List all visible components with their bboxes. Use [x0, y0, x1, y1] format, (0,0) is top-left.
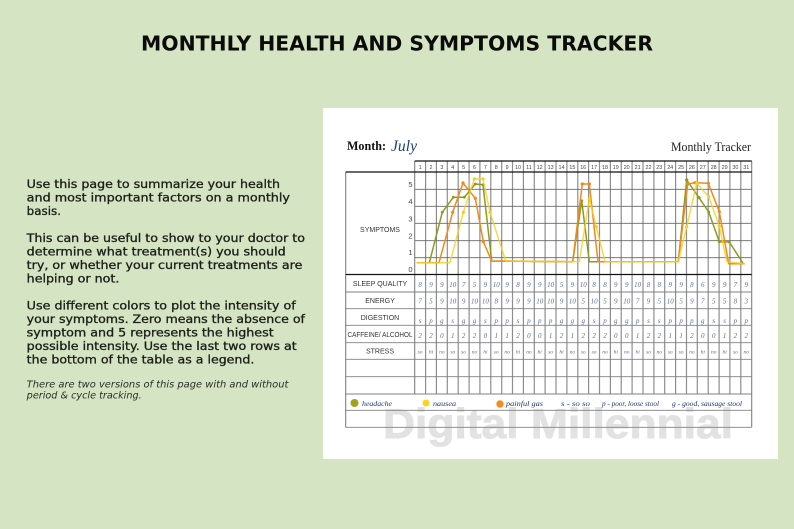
row values: caffeine and alcohol: 0	[701, 332, 705, 340]
row values: caffeine and alcohol: 0	[440, 332, 444, 340]
row values: digestion: p	[667, 317, 672, 325]
row values: sleep quality: 10	[547, 281, 555, 289]
day numbers header: 20	[624, 165, 630, 171]
paragraph: summary	[27, 177, 290, 218]
title: MONTHLY HEALTH AND SYMPTOMS TRACKER	[141, 32, 653, 56]
row labels: SLEEP QUALITY	[353, 281, 407, 288]
line: painful gas	[417, 181, 745, 264]
row values: stress: hi	[538, 350, 542, 356]
day numbers header: 30	[732, 165, 738, 171]
day numbers header: 2	[430, 165, 432, 171]
paragraph: colors: possible intensity. Use the last two rows at	[27, 339, 297, 353]
row values: stress: no	[602, 350, 608, 356]
row values: sleep quality: 8	[658, 281, 662, 289]
day numbers header: 22	[646, 165, 652, 171]
row values: stress: so	[679, 350, 684, 356]
legend key: digestion poor: p - poor, loose stool	[601, 399, 659, 408]
row values: digestion: g	[625, 317, 629, 325]
row values: stress: hi	[701, 350, 705, 356]
sheet heading: Monthly Tracker	[671, 140, 752, 154]
row values: stress: so	[668, 350, 673, 356]
row values: stress: hi	[516, 350, 521, 356]
day numbers header: 5	[462, 165, 465, 171]
row values: sleep quality: 9	[625, 281, 629, 289]
row values: sleep quality: 9	[668, 281, 672, 289]
legend label: headache: headache	[362, 399, 393, 408]
row values: energy: 10	[449, 298, 457, 306]
row values: sleep quality: 8	[603, 281, 607, 289]
row values: sleep quality: 9	[745, 281, 749, 289]
row values: energy: 5	[712, 298, 716, 306]
row values: stress: no	[711, 350, 717, 356]
table grid	[346, 161, 752, 427]
row values: stress: no	[624, 350, 630, 356]
row values: caffeine and alcohol: 0	[625, 332, 629, 340]
row values: energy: 5	[581, 298, 585, 306]
row values: caffeine and alcohol: 0	[484, 332, 488, 340]
row values: caffeine and alcohol: 2	[581, 332, 585, 340]
row values: digestion: g	[560, 317, 564, 325]
row values: stress: hi	[635, 350, 640, 356]
row values: energy: 5	[603, 298, 607, 306]
row values: energy: 7	[701, 298, 705, 306]
row values: energy: 9	[516, 298, 520, 306]
note: versions: period & cycle tracking.	[26, 390, 142, 402]
row values: sleep quality: 9	[429, 281, 433, 289]
legend label: painful gas: painful gas	[505, 399, 543, 408]
row values: digestion: s	[419, 317, 422, 325]
day numbers header: 4	[451, 165, 454, 171]
day numbers header: 21	[635, 165, 641, 171]
row values: energy: 9	[527, 298, 531, 306]
legend marker: nausea	[422, 400, 430, 406]
row values: caffeine and alcohol: 2	[603, 332, 607, 340]
symptom scale axis: 1	[408, 248, 413, 257]
symptom scale axis: 4	[408, 197, 413, 206]
symptom scale axis: 0	[408, 265, 413, 274]
paragraph: doctor	[26, 231, 305, 286]
row values: sleep quality: 10	[580, 281, 587, 289]
paragraph: colors: the bottom of the table as a legend.	[27, 352, 254, 366]
day numbers header: 8	[495, 165, 498, 171]
symptom scale axis: 5	[408, 180, 413, 189]
row values: sleep quality: 8	[418, 281, 422, 289]
row values: sleep quality: 9	[440, 281, 444, 289]
paragraph: colors: your symptoms. Zero means the absence of	[27, 312, 306, 326]
row values: digestion: g	[701, 317, 705, 325]
row values: caffeine and alcohol: 1	[451, 332, 455, 340]
row values: energy: 8	[494, 298, 498, 306]
row values: sleep quality: 7	[462, 281, 466, 289]
row values: caffeine and alcohol: 2	[592, 332, 596, 340]
row values: energy: 3	[744, 298, 749, 306]
legend key: digestion so so: s - so so	[561, 399, 590, 408]
row values: sleep quality: 8	[516, 281, 520, 289]
row values: stress: no	[439, 350, 445, 356]
day numbers header: 29	[722, 165, 728, 171]
symptom scale axis: 3	[408, 214, 413, 223]
row values: sleep quality: 8	[592, 281, 596, 289]
row values: digestion: p	[548, 317, 553, 325]
row values: caffeine and alcohol: 2	[462, 332, 466, 340]
row values: stress: no	[504, 350, 510, 356]
day numbers header: 11	[526, 165, 532, 171]
month handwritten value: July	[391, 138, 418, 155]
row values: stress: so	[548, 350, 553, 356]
row values: energy: 9	[505, 298, 509, 306]
row values: stress: hi	[429, 350, 434, 356]
row values: stress: no	[657, 350, 662, 356]
row values: digestion: p	[678, 317, 683, 325]
row values: sleep quality: 9	[571, 281, 575, 289]
row values: energy: 7	[418, 298, 422, 306]
row values: caffeine and alcohol: 1	[636, 332, 639, 340]
row values: digestion: g	[571, 317, 575, 325]
row values: energy: 5	[429, 298, 433, 306]
row values: sleep quality: 9	[679, 281, 683, 289]
row values: digestion: g	[614, 317, 618, 325]
row values: caffeine and alcohol: 0	[712, 332, 716, 340]
day numbers header: 24	[667, 165, 673, 171]
month label: Month:	[347, 139, 386, 153]
day numbers header: 23	[656, 165, 662, 171]
row values: stress: so	[733, 350, 738, 356]
paragraph: doctor: try, or whether your current treatments are	[27, 258, 302, 272]
row values: digestion: p	[635, 317, 640, 325]
row values: sleep quality: 8	[647, 281, 651, 289]
day numbers header: 19	[613, 165, 619, 171]
row values: digestion: g	[581, 317, 585, 325]
row values: digestion: g	[473, 317, 477, 325]
paragraph: colors: symptom and 5 represents the highest	[27, 326, 274, 340]
watermark: Digital Millennial	[383, 400, 733, 447]
day numbers header: 1	[419, 165, 422, 171]
chart: symptom lines	[417, 177, 745, 264]
row values: caffeine and alcohol: 2	[418, 332, 422, 340]
row values: stress: so	[592, 350, 597, 356]
row values: energy: 10	[667, 298, 674, 306]
row values: caffeine and alcohol: 0	[614, 332, 618, 340]
row labels: ENERGY	[365, 298, 395, 305]
paragraph: summary: and most important factors on a monthly	[27, 190, 290, 204]
paragraph: doctor: helping or not.	[27, 272, 119, 286]
row values: digestion: g	[462, 317, 466, 325]
row values: caffeine and alcohol: 2	[745, 332, 749, 340]
row values: digestion: p	[689, 317, 694, 325]
day numbers header: 17	[591, 165, 597, 171]
row values: stress: so	[450, 350, 455, 356]
row values: digestion: p	[493, 317, 498, 325]
row values: digestion: s	[593, 317, 596, 325]
legend marker: headache	[350, 399, 358, 407]
day numbers header: 27	[700, 165, 706, 171]
day numbers header: 10	[515, 165, 521, 171]
row values: caffeine and alcohol: 2	[647, 332, 651, 340]
legend	[350, 399, 742, 408]
note: versions	[26, 380, 289, 402]
row labels: SYMPTOMS	[360, 227, 400, 234]
row values: stress: no	[570, 350, 575, 356]
row values: stress: hi	[559, 350, 564, 356]
row values: digestion: p	[504, 317, 509, 325]
row values: energy: 9	[690, 298, 694, 306]
legend key: digestion good: g - good, sausage stool	[672, 399, 742, 408]
day numbers header: 16	[580, 165, 586, 171]
row values: sleep quality: 5	[473, 281, 477, 289]
row values: caffeine and alcohol: 1	[723, 332, 726, 340]
row values: digestion: s	[712, 317, 715, 325]
row values: sleep quality: 6	[701, 281, 705, 289]
day numbers header: 26	[689, 165, 695, 171]
row values: sleep quality: 9	[614, 281, 618, 289]
row values: digestion: s	[484, 317, 487, 325]
day numbers header: 18	[602, 165, 608, 171]
row values: energy: 7	[636, 298, 640, 306]
row values: caffeine and alcohol: 2	[560, 332, 564, 340]
paragraph: doctor: This can be useful to show to your doctor to	[26, 231, 305, 245]
legend marker: painful gas	[496, 400, 504, 408]
line: nausea	[417, 177, 745, 264]
day numbers header: 25	[678, 165, 684, 171]
row values: digestion: p	[526, 317, 531, 325]
day numbers header: 14	[558, 165, 564, 171]
row values: stress: hi	[483, 350, 488, 356]
row values: sleep quality: 9	[723, 281, 727, 289]
row values: energy: 5	[723, 298, 727, 306]
text block: instructions	[26, 177, 306, 402]
row values: sleep quality: 10	[634, 281, 642, 289]
row values: stress: so	[646, 350, 651, 356]
day numbers header: 9	[506, 165, 509, 171]
day numbers header: 13	[548, 165, 554, 171]
row values: digestion: p	[733, 317, 738, 325]
row values: caffeine and alcohol: 2	[429, 332, 433, 340]
panel: tracker sheet	[323, 108, 778, 459]
row values: caffeine and alcohol: 2	[690, 332, 694, 340]
row values: stress: hi	[614, 350, 618, 356]
day numbers header: 7	[484, 165, 487, 171]
row values: digestion: p	[428, 317, 433, 325]
row values: energy: 10	[482, 298, 489, 306]
row values: energy: 10	[536, 298, 544, 306]
row values: caffeine and alcohol: 1	[549, 332, 552, 340]
row values: stress: so	[494, 350, 499, 356]
row values: caffeine and alcohol: 2	[516, 332, 520, 340]
row values: caffeine and alcohol: 2	[658, 332, 662, 340]
symptom scale axis: 2	[408, 231, 413, 240]
row values: caffeine and alcohol: 1	[679, 332, 683, 340]
row values: caffeine and alcohol: 1	[571, 332, 574, 340]
day numbers header: 3	[440, 165, 443, 171]
row values: sleep quality: 8	[690, 281, 694, 289]
note: versions: There are two versions of this page with and without	[27, 380, 289, 390]
row values: stress: no	[472, 350, 478, 356]
row values: digestion: s	[517, 317, 520, 325]
row values: sleep quality: 10	[449, 281, 457, 289]
day numbers header: 12	[537, 165, 543, 171]
line: headache	[417, 178, 743, 264]
paragraph: colors	[27, 298, 306, 366]
day numbers header: 6	[473, 165, 476, 171]
row values: stress: hi	[722, 350, 727, 356]
day numbers header: 31	[743, 165, 749, 171]
row values: stress: so	[418, 350, 423, 356]
row labels: STRESS	[366, 348, 394, 355]
row values: caffeine and alcohol: 0	[527, 332, 531, 340]
row values: sleep quality: 9	[538, 281, 542, 289]
row values: sleep quality: 9	[505, 281, 509, 289]
row values: energy: 9	[440, 298, 444, 306]
row values: caffeine and alcohol: 2	[473, 332, 477, 340]
row values: energy: 10	[547, 298, 555, 306]
symptom scale axis	[408, 180, 413, 274]
row values: sleep quality: 9	[484, 281, 488, 289]
row values: energy: 9	[560, 298, 564, 306]
day numbers header: 28	[711, 165, 717, 171]
row labels	[348, 227, 413, 355]
row values: caffeine and alcohol: 0	[538, 332, 542, 340]
row values: stress: no	[526, 350, 532, 356]
row values: digestion: s	[658, 317, 661, 325]
row values: energy: 9	[647, 298, 651, 306]
row values: sleep quality: 9	[527, 281, 531, 289]
row values: caffeine and alcohol: 2	[734, 332, 738, 340]
row values: stress: so	[581, 350, 586, 356]
row values: energy: 10	[591, 298, 598, 306]
row values: energy: 5	[679, 298, 683, 306]
row values: caffeine and alcohol: 1	[505, 332, 509, 340]
row values: energy: 10	[471, 298, 478, 306]
legend label: nausea: nausea	[433, 399, 456, 408]
row values: digestion: s	[647, 317, 650, 325]
row values: caffeine and alcohol: 1	[668, 332, 672, 340]
row values: digestion: p	[744, 317, 749, 325]
row values: stress: no	[689, 350, 695, 356]
row values: sleep quality: 7	[734, 281, 738, 289]
row values: digestion: s	[723, 317, 726, 325]
row labels: DIGESTION	[361, 315, 399, 322]
row values: energy: 9	[462, 298, 466, 306]
paragraph: doctor: determine what treatment(s) you should	[27, 244, 286, 258]
row values: energy: 8	[734, 298, 738, 306]
row values: energy: 9	[614, 298, 618, 306]
row values: stress: no	[744, 350, 749, 356]
row values: energy: 10	[569, 298, 576, 306]
row values: energy: 10	[623, 298, 631, 306]
row values: sleep quality: 5	[560, 281, 564, 289]
row labels: CAFFEINE/ ALCOHOL	[348, 332, 413, 339]
paragraph: summary: Use this page to summarize your health	[27, 177, 280, 191]
row values: digestion: p	[602, 317, 607, 325]
row values: stress: so	[461, 350, 466, 356]
row values: digestion: s	[451, 317, 454, 325]
day numbers header: 15	[569, 165, 575, 171]
row values: sleep quality: 9	[712, 281, 716, 289]
paragraph: summary: basis.	[27, 204, 61, 218]
paragraph: colors: Use different colors to plot the intensity of	[27, 298, 297, 312]
row values: digestion: p	[537, 317, 542, 325]
row values: digestion: g	[440, 317, 444, 325]
row values: caffeine and alcohol: 1	[494, 332, 498, 340]
row values: energy: 5	[658, 298, 662, 306]
row values: sleep quality: 10	[493, 281, 500, 289]
